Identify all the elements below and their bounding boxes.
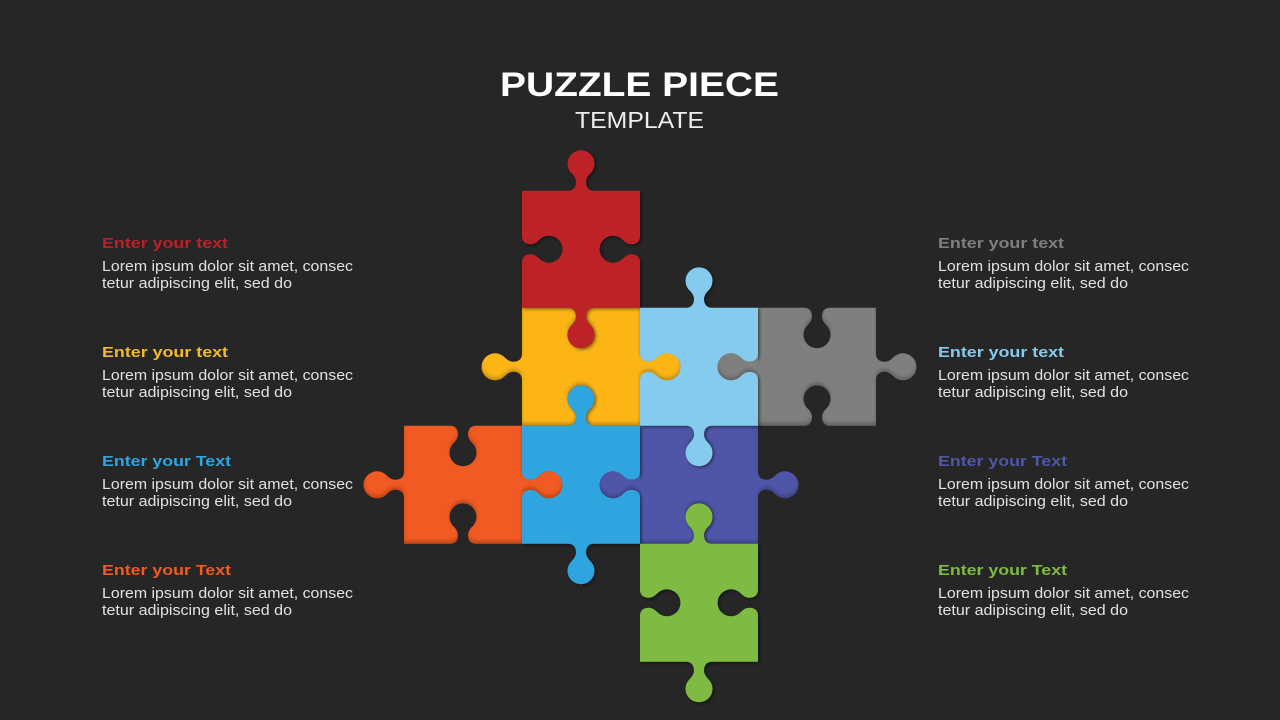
piece: grey (718, 308, 916, 426)
text block: yellow, left: Enter your text (102, 344, 228, 361)
text block: light blue, right: Lorem ipsum dolor sit amet, consec (938, 368, 1189, 384)
text block: yellow, left (102, 344, 353, 401)
text block: red, left: Enter your text (102, 235, 228, 252)
text block: orange, left: Enter your Text (102, 562, 231, 579)
text block: green, right (938, 562, 1189, 619)
text block: yellow, left: Lorem ipsum dolor sit amet, consec (102, 368, 353, 384)
piece: green (640, 503, 758, 702)
text block: grey, right (938, 235, 1189, 292)
text block: green, right: Lorem ipsum dolor sit amet, consec (938, 586, 1189, 602)
text block: red, left: Lorem ipsum dolor sit amet, consec (102, 259, 353, 275)
subtitle: TEMPLATE (575, 107, 704, 133)
text block: orange, left: Lorem ipsum dolor sit amet, consec (102, 586, 353, 602)
text block: grey, right: tetur adipiscing elit, sed do (938, 276, 1128, 292)
text block: green, right: tetur adipiscing elit, sed do (938, 603, 1128, 619)
text block: blue, left: tetur adipiscing elit, sed do (102, 494, 292, 510)
text block: yellow, left: tetur adipiscing elit, sed do (102, 385, 292, 401)
piece: purple (600, 426, 798, 544)
piece: red (522, 150, 640, 348)
piece: orange (364, 426, 562, 544)
text block: blue, left: Lorem ipsum dolor sit amet, consec (102, 477, 353, 493)
text block: grey, right: Lorem ipsum dolor sit amet, consec (938, 259, 1189, 275)
text block: purple, right: tetur adipiscing elit, sed do (938, 494, 1128, 510)
text block: purple, right: Enter your Text (938, 453, 1067, 470)
text block: light blue, right (938, 344, 1189, 401)
text block: orange, left (102, 562, 353, 619)
puzzle diagram (364, 150, 916, 702)
text block: red, left (102, 235, 353, 292)
piece: light blue (640, 267, 758, 466)
title: PUZZLE PIECE (500, 66, 779, 104)
text block: purple, right: Lorem ipsum dolor sit amet, consec (938, 477, 1189, 493)
text block: red, left: tetur adipiscing elit, sed do (102, 276, 292, 292)
piece: yellow (482, 308, 680, 426)
text block: blue, left (102, 453, 353, 510)
text block: light blue, right: Enter your text (938, 344, 1064, 361)
piece: blue (522, 385, 640, 584)
text block: green, right: Enter your Text (938, 562, 1067, 579)
text block: grey, right: Enter your text (938, 235, 1064, 252)
text block: blue, left: Enter your Text (102, 453, 231, 470)
interlocking tabs over neighbouring pieces (522, 353, 758, 498)
text block: light blue, right: tetur adipiscing elit, sed do (938, 385, 1128, 401)
text block: purple, right (938, 453, 1189, 510)
text block: orange, left: tetur adipiscing elit, sed do (102, 603, 292, 619)
